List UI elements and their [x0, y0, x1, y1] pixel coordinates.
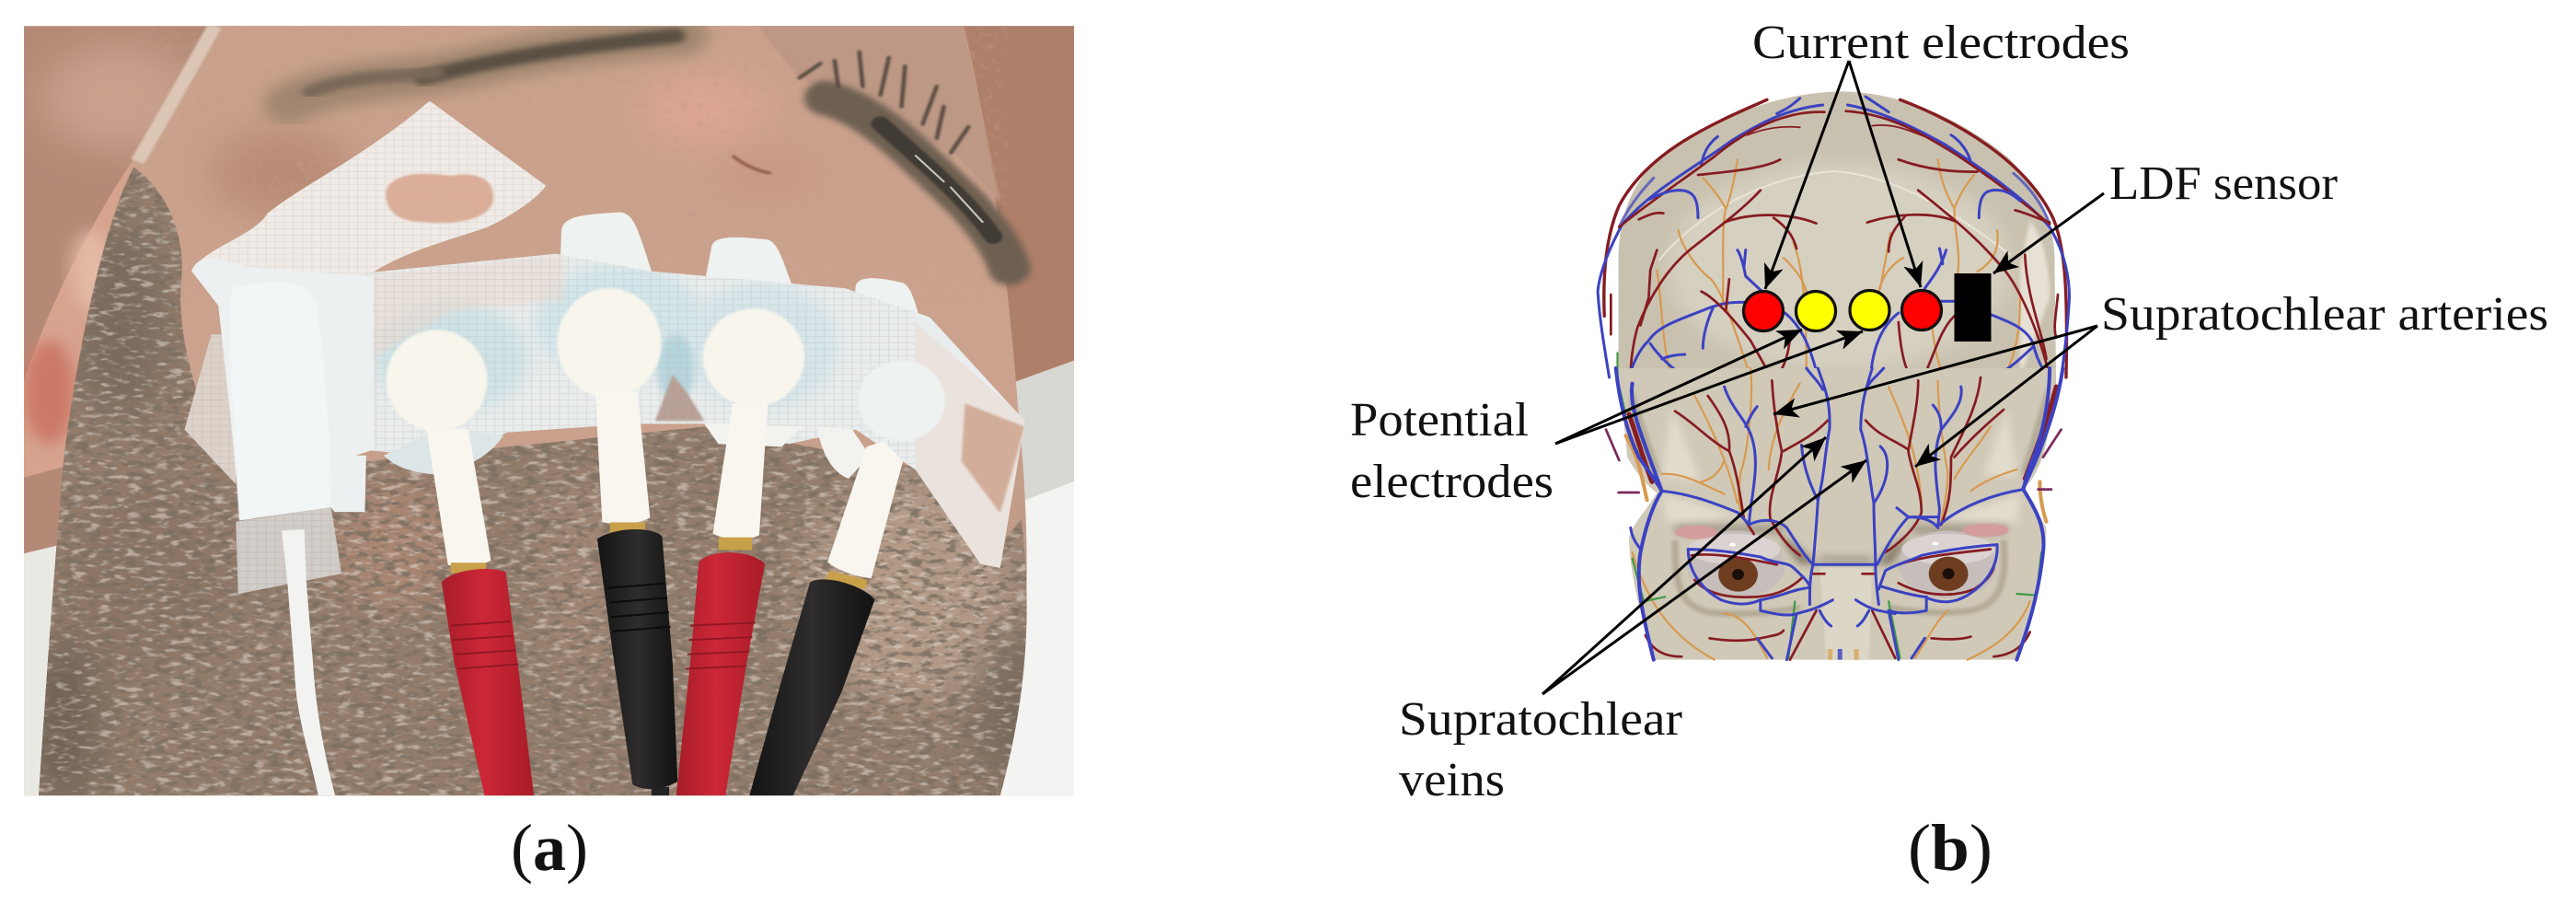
- forehead lighter centre: [1669, 163, 2010, 371]
- left hairline light edge: [137, 26, 214, 161]
- black plug 2: [597, 529, 677, 789]
- label: Potential electrodes: Potential: [1350, 394, 1529, 446]
- label: Potential electrodes: electrodes: [1350, 456, 1554, 508]
- skull upper: bone and vessels: [1598, 91, 2070, 387]
- electrode buttons: [386, 288, 945, 441]
- temple bone highlight: [2020, 221, 2050, 377]
- facial veins and arteries: [1606, 368, 2062, 660]
- label: Supratochlear veins: [1399, 693, 1682, 806]
- skull bone: [1619, 91, 2056, 387]
- gold pin connectors: [451, 522, 868, 589]
- plug grip ridges: [451, 584, 755, 669]
- black plug 4: [749, 579, 875, 795]
- scar mark: [733, 156, 771, 173]
- photo background: pillow and neck: [24, 26, 1074, 795]
- red plug 1: [442, 569, 534, 795]
- brow shadows: [1671, 525, 2010, 564]
- sensor block: [191, 259, 374, 594]
- eyelid shading: [757, 26, 1000, 203]
- lower orbit rim shading: [1675, 540, 2004, 614]
- label: Supratochlear veins: veins: [1399, 754, 1505, 806]
- label: Current electrodes: Current electrodes: [1752, 17, 2130, 69]
- left eyebrow: [289, 36, 683, 104]
- right eyebrow and lashes: [800, 52, 1010, 268]
- electrode: potential right (yellow): [1850, 291, 1889, 330]
- nose bridge: [1819, 568, 1872, 660]
- left eye: [1686, 531, 1785, 598]
- electrode: potential left (yellow): [1796, 291, 1835, 331]
- skull lower: face, eyes and vessels: [1606, 368, 2062, 660]
- tape fold left of sensor: [185, 334, 236, 484]
- label: LDF sensor: LDF sensor: [2109, 157, 2338, 210]
- lacrimal glands: [1675, 524, 2008, 539]
- nasal opening detail: [1828, 649, 1859, 660]
- red plug 3: [676, 552, 765, 795]
- electrode gel patches beneath band: [384, 423, 870, 479]
- arrows: potential electrodes: [1555, 330, 1863, 444]
- electrode: current left (red): [1743, 291, 1784, 331]
- caption (b): (b): [1908, 811, 1993, 885]
- label: Supratochlear veins: Supratochlear: [1399, 693, 1682, 746]
- LDF sensor block: [1955, 273, 1992, 342]
- caption (a): (a): [511, 811, 588, 885]
- electrode stems: [426, 392, 903, 578]
- electrode tabs: [560, 212, 918, 313]
- face bone: [1619, 368, 2056, 660]
- right eye: [1899, 531, 1997, 598]
- forehead redness: [212, 75, 817, 219]
- temple lighter plates: [1662, 408, 2020, 525]
- arrows: current electrodes: [1765, 61, 1921, 289]
- tape flap over forehead: [191, 101, 546, 276]
- arrows: supratochlear veins: [1542, 437, 1866, 694]
- cranial veins and arteries: [1598, 97, 2070, 377]
- panel b: skull anatomy diagram: [1350, 17, 2548, 806]
- arrows: supratochlear arteries: [1773, 326, 2097, 467]
- electrode: current right (red): [1901, 291, 1942, 330]
- label: Supratochlear arteries: Supratochlear arteries: [2101, 288, 2548, 341]
- hair region: [24, 156, 1038, 807]
- cranial suture arc: [1658, 171, 2010, 261]
- temple dark recess: [1630, 387, 1662, 476]
- cable below black plug: [652, 787, 669, 795]
- arrow: LDF sensor: [1993, 193, 2104, 273]
- sensor cable: [282, 529, 335, 795]
- head skin: [39, 26, 1027, 795]
- tape band with electrodes beneath: [367, 254, 1025, 568]
- skin pore texture: [134, 26, 1007, 204]
- label: Potential electrodes: [1350, 394, 1554, 508]
- ear: [24, 156, 141, 478]
- panel a: photo of electrodes on forehead: [24, 26, 1074, 807]
